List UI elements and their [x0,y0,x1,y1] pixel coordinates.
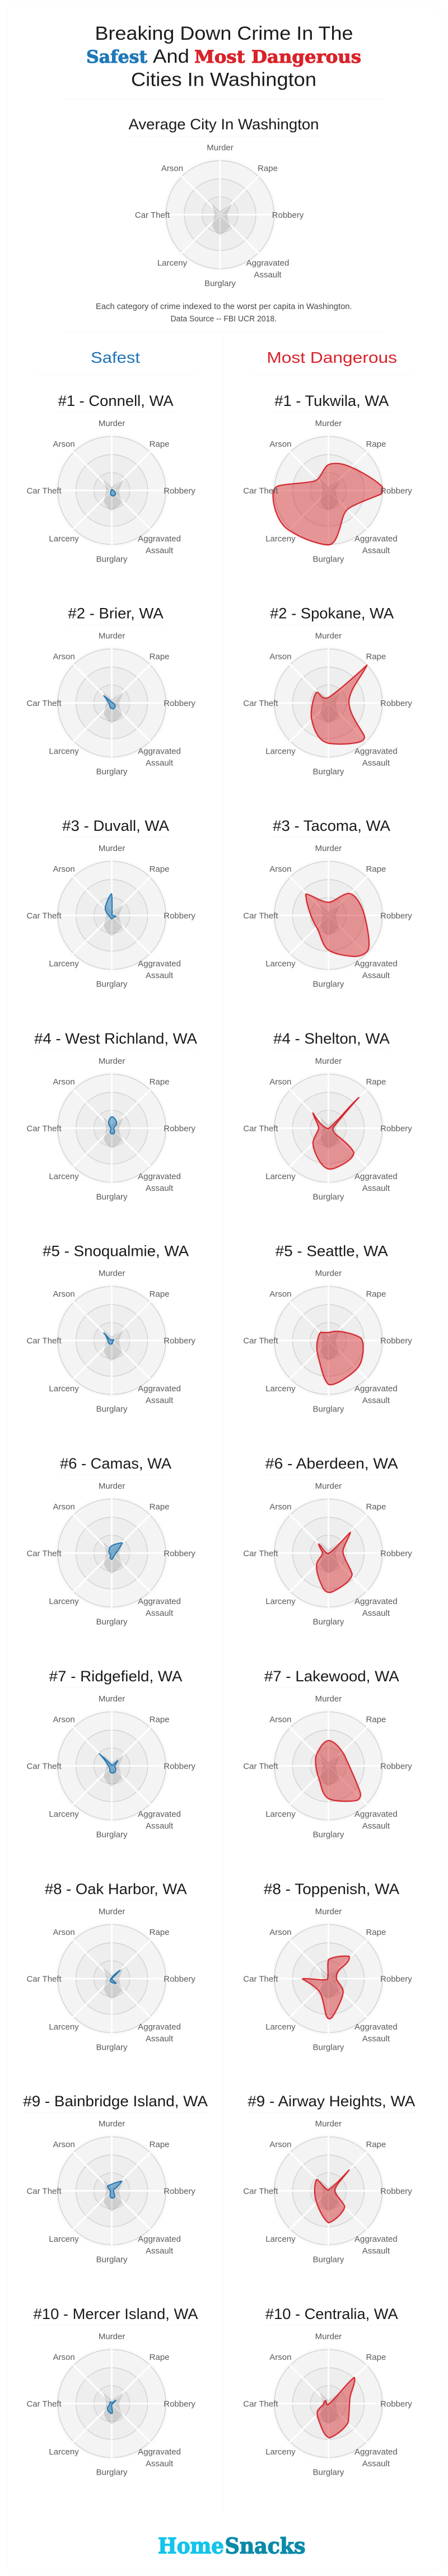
axis labels: Murder [315,1907,342,1916]
radar chart: Aberdeen [243,1481,412,1627]
heading: Brier: #2 - Brier, WA [68,605,164,621]
axis labels [243,2332,412,2477]
heading: West Richland: #4 - West Richland, WA [34,1030,197,1047]
axis labels: Burglary [312,767,344,777]
axis labels: Robbery [164,1549,195,1559]
radar chart: West Richland [26,1056,195,1201]
axis labels: Robbery [380,699,412,708]
title: Breaking Down Crime In The [95,23,353,44]
heading: Centralia: #10 - Centralia, WA [265,2306,398,2322]
axis labels: Burglary [96,2042,128,2053]
column heading: most dangerous: Most Dangerous [267,349,397,366]
axis labels: Car Theft [243,2400,278,2409]
axis labels: Arson [269,1715,291,1724]
data shape: Brier [104,696,115,709]
axis labels: Assault [146,2459,174,2469]
axis labels: Larceny [265,1384,296,1394]
title: Safest [86,47,148,67]
axis labels: Murder [315,1481,342,1491]
axis labels: Larceny [49,1172,79,1181]
axis labels: Murder [99,2119,125,2129]
axis labels: Arson [269,2353,291,2362]
axis labels: Assault [362,971,390,980]
data shape: Duvall [105,894,116,919]
axis labels: Aggravated [354,1597,398,1606]
axis labels: Burglary [96,2255,128,2264]
axis labels: Murder [315,632,342,641]
data shape: Centralia [317,2377,354,2438]
axis labels: Car Theft [26,2187,62,2196]
radar chart: Tacoma [243,844,412,989]
axis labels: Assault [254,270,282,279]
axis labels [243,419,412,564]
axis labels: Arson [53,652,75,662]
axis labels: Rape [150,1077,170,1087]
axis labels: Aggravated [354,534,398,544]
axis labels: Larceny [49,534,79,544]
note: data source [96,302,352,324]
axis labels: Car Theft [243,699,278,708]
axis labels: Aggravated [354,747,398,756]
radar chart: Toppenish [243,1907,412,2053]
axis labels: Robbery [164,911,195,920]
axis labels: Assault [146,971,174,980]
axis labels: Car Theft [243,1336,278,1346]
axis labels: Larceny [49,2447,79,2457]
radar chart: Seattle [243,1269,412,1414]
axis labels: Murder [315,2119,342,2129]
data shape: Mercer Island [108,2400,116,2414]
axis labels: Murder [99,2332,125,2341]
axis labels: Burglary [96,767,128,777]
axis labels: Arson [53,1502,75,1512]
axis labels: Aggravated [138,2234,181,2244]
heading: Duvall: #3 - Duvall, WA [62,817,169,834]
axis labels: Rape [150,1289,170,1299]
axis labels: Larceny [265,959,296,969]
data shape: Camas [109,1543,122,1559]
axis labels [26,1056,195,1201]
axis labels: Rape [150,864,170,874]
axis labels: Assault [362,1184,390,1193]
axis labels: Robbery [380,1549,412,1559]
heading: Snoqualmie: #5 - Snoqualmie, WA [43,1243,189,1260]
axis labels: Larceny [265,534,296,544]
axis labels [26,419,195,564]
axis labels: Car Theft [26,1336,62,1346]
axis labels: Car Theft [26,486,62,496]
axis labels: Robbery [380,1974,412,1984]
axis labels: Burglary [312,1193,344,1201]
heading: Tukwila: #1 - Tukwila, WA [274,392,389,409]
axis labels: Larceny [265,2022,296,2032]
axis labels [26,632,195,777]
heading: Seattle: #5 - Seattle, WA [276,1243,388,1260]
axis labels: Murder [315,419,342,428]
axis labels: Aggravated [138,747,181,756]
data shape: Toppenish [302,1956,349,2019]
axis labels: Car Theft [26,1124,62,1133]
axis labels: Car Theft [26,1549,62,1559]
axis labels: Robbery [164,1336,195,1346]
axis labels: Larceny [49,2022,79,2032]
axis labels: Car Theft [26,699,62,708]
radar chart: Spokane [243,632,412,777]
axis labels: Car Theft [243,1549,278,1559]
axis labels: Aggravated [138,2022,181,2032]
heading: Connell: #1 - Connell, WA [58,392,174,409]
radar chart: Snoqualmie [26,1269,195,1414]
radar chart: average city [135,143,304,288]
axis labels: Larceny [49,1597,79,1606]
axis labels: Aggravated [138,1597,181,1606]
axis labels: Burglary [312,2255,344,2264]
data shape: Bainbridge Island [108,2181,122,2198]
axis labels: Aggravated [246,258,289,268]
axis labels [243,1907,412,2053]
axis labels: Rape [150,440,170,449]
axis labels: Assault [146,546,174,555]
axis labels [26,1907,195,2053]
axis labels: Arson [269,1502,291,1512]
axis labels [135,143,304,288]
axis labels: Aggravated [138,959,181,969]
axis labels: Robbery [164,1974,195,1984]
axis labels [243,844,412,989]
axis labels: Larceny [265,1597,296,1606]
radar chart: Brier [26,632,195,777]
axis labels [243,1056,412,1201]
heading: Shelton: #4 - Shelton, WA [273,1030,390,1047]
axis labels: Car Theft [26,1761,62,1771]
title: And [153,46,189,67]
axis labels [26,2332,195,2477]
axis labels: Burglary [312,1617,344,1627]
axis labels [26,1269,195,1414]
axis labels: Assault [362,1821,390,1831]
axis labels: Assault [362,546,390,555]
heading: Camas: #6 - Camas, WA [60,1455,171,1472]
note: data source: Each category of crime indexed to the worst per capita in Washington. [96,302,352,311]
axis labels: Robbery [380,486,412,496]
axis labels [26,2119,195,2264]
axis labels: Larceny [265,2447,296,2457]
axis labels: Burglary [96,2468,128,2477]
radar chart: Camas [26,1481,195,1627]
axis labels: Robbery [164,1124,195,1133]
axis labels: Arson [53,1715,75,1724]
axis labels [243,1269,412,1414]
axis labels: Larceny [265,2234,296,2244]
radar chart: Mercer Island [26,2332,195,2477]
axis labels: Arson [269,652,291,662]
axis labels: Rape [366,1077,386,1087]
axis labels: Arson [53,1289,75,1299]
axis labels: Aggravated [354,2234,398,2244]
axis labels: Assault [146,758,174,768]
axis labels: Car Theft [26,2400,62,2409]
axis labels: Murder [99,1694,125,1704]
title: Most Dangerous [194,47,361,67]
axis labels: Arson [53,2140,75,2149]
axis labels: Aggravated [354,2447,398,2457]
axis labels: Assault [146,1396,174,1405]
axis labels: Rape [366,652,386,662]
axis labels: Assault [362,1609,390,1618]
axis labels: Larceny [49,1384,79,1394]
axis labels: Rape [366,864,386,874]
axis labels: Arson [269,440,291,449]
axis labels: Robbery [380,1761,412,1771]
axis labels: Rape [366,1715,386,1724]
axis labels: Robbery [272,211,304,220]
axis labels [243,1481,412,1627]
axis labels: Assault [362,2459,390,2469]
axis labels: Burglary [312,2468,344,2477]
heading: Aberdeen: #6 - Aberdeen, WA [265,1455,398,1472]
axis labels: Larceny [49,2234,79,2244]
axis labels: Aggravated [138,1172,181,1181]
axis labels: Assault [362,758,390,768]
axis labels: Burglary [96,1830,128,1840]
axis labels: Aggravated [354,1172,398,1181]
axis labels: Robbery [164,2400,195,2409]
axis labels: Rape [150,2140,170,2149]
data shape: Lakewood [316,1741,361,1801]
data shape: Ridgefield [99,1754,118,1773]
axis labels: Car Theft [243,486,278,496]
axis labels: Arson [53,864,75,874]
axis labels: Arson [161,163,183,173]
axis labels: Aggravated [354,959,398,969]
data shape: Shelton [313,1097,359,1169]
heading: Bainbridge Island: #9 - Bainbridge Island, WA [23,2093,208,2110]
axis labels [243,632,412,777]
axis labels: Burglary [96,554,128,564]
heading: Oak Harbor: #8 - Oak Harbor, WA [45,1881,187,1897]
axis labels: Arson [53,440,75,449]
axis labels: Rape [366,1928,386,1937]
axis labels: Larceny [49,959,79,969]
radar chart: Oak Harbor [26,1907,195,2053]
axis labels: Murder [99,1907,125,1916]
axis labels: Larceny [49,1810,79,1819]
axis labels: Larceny [157,258,188,268]
axis labels: Assault [146,1821,174,1831]
axis labels: Murder [99,1269,125,1278]
axis labels: Robbery [164,1761,195,1771]
heading: Spokane: #2 - Spokane, WA [270,605,394,621]
logo: HomeSnacks: Home [158,2533,224,2559]
axis labels: Rape [150,1928,170,1937]
axis labels: Arson [269,1928,291,1937]
axis labels: Car Theft [243,1124,278,1133]
axis labels: Rape [366,2140,386,2149]
axis labels: Car Theft [243,1974,278,1984]
axis labels: Robbery [380,2187,412,2196]
radar chart: Airway Heights [243,2119,412,2264]
heading: Airway Heights: #9 - Airway Heights, WA [248,2093,416,2110]
axis labels: Rape [150,652,170,662]
data shape: Connell [110,489,115,496]
title: Cities In Washington [131,69,316,91]
axis labels [243,2119,412,2264]
axis labels: Assault [146,1184,174,1193]
axis labels: Car Theft [26,911,62,920]
axis labels: Car Theft [135,211,170,220]
axis labels: Robbery [380,911,412,920]
axis labels [26,1694,195,1840]
column heading: safest: Safest [91,349,140,366]
axis labels: Murder [99,419,125,428]
axis labels: Arson [269,2140,291,2149]
heading: Ridgefield: #7 - Ridgefield, WA [49,1668,183,1685]
axis labels: Arson [53,2353,75,2362]
axis labels: Larceny [265,1172,296,1181]
axis labels: Aggravated [354,2022,398,2032]
axis labels: Burglary [96,1617,128,1627]
axis labels: Robbery [164,699,195,708]
radar chart: Ridgefield [26,1694,195,1840]
axis labels: Murder [99,844,125,853]
axis labels: Burglary [96,1405,128,1414]
axis labels: Rape [150,2353,170,2362]
axis labels: Murder [207,143,234,152]
axis labels: Aggravated [138,534,181,544]
note: data source: Data Source -- FBI UCR 2018. [171,314,277,324]
axis labels: Murder [99,632,125,641]
axis labels: Arson [53,1928,75,1937]
axis labels: Burglary [312,1405,344,1414]
axis labels: Murder [315,844,342,853]
heading: Tacoma: #3 - Tacoma, WA [273,817,390,834]
axis labels: Murder [315,1694,342,1704]
axis labels: Robbery [380,2400,412,2409]
data shape: West Richland [109,1117,116,1134]
radar chart: Bainbridge Island [26,2119,195,2264]
axis labels: Rape [366,1289,386,1299]
axis labels: Burglary [204,279,236,288]
axis labels: Assault [146,2034,174,2044]
axis labels: Burglary [312,980,344,989]
axis labels: Murder [315,1269,342,1278]
axis labels: Rape [150,1715,170,1724]
axis labels: Robbery [164,486,195,496]
axis labels: Larceny [265,1810,296,1819]
axis labels: Aggravated [354,1384,398,1394]
axis labels: Arson [269,864,291,874]
axis labels: Murder [315,2332,342,2341]
axis labels: Rape [366,2353,386,2362]
data shape: Snoqualmie [104,1333,114,1344]
axis labels: Assault [362,1396,390,1405]
axis labels [243,1694,412,1840]
heading: Toppenish: #8 - Toppenish, WA [264,1881,399,1897]
heading: Lakewood: #7 - Lakewood, WA [264,1668,399,1685]
axis labels [26,1481,195,1627]
axis labels: Larceny [49,747,79,756]
axis labels: Aggravated [354,1810,398,1819]
radar chart: Tukwila [243,419,412,564]
data shape: Tacoma [306,894,369,956]
axis labels: Aggravated [138,2447,181,2457]
axis labels: Robbery [380,1336,412,1346]
axis labels: Robbery [380,1124,412,1133]
radar chart: Shelton [243,1056,412,1201]
axis labels: Burglary [312,2042,344,2053]
axis labels: Aggravated [138,1810,181,1819]
axis labels: Burglary [312,1830,344,1840]
data shape: Tukwila [273,464,382,545]
axis labels: Murder [99,1056,125,1066]
data shape: Seattle [317,1331,363,1385]
axis labels: Assault [362,2246,390,2256]
axis labels: Aggravated [138,1384,181,1394]
axis labels: Arson [53,1077,75,1087]
axis labels: Rape [366,440,386,449]
title [86,23,361,91]
axis labels: Rape [366,1502,386,1512]
radar chart: Connell [26,419,195,564]
axis labels: Robbery [164,2187,195,2196]
axis labels: Arson [269,1077,291,1087]
radar chart: Duvall [26,844,195,989]
data shape: Spokane [311,665,367,744]
radar chart: Lakewood [243,1694,412,1840]
heading: Mercer Island: #10 - Mercer Island, WA [34,2306,198,2322]
axis labels: Burglary [96,980,128,989]
axis labels: Assault [362,2034,390,2044]
axis labels: Murder [315,1056,342,1066]
axis labels [26,844,195,989]
axis labels: Car Theft [243,2187,278,2196]
axis labels: Arson [269,1289,291,1299]
axis labels: Larceny [265,747,296,756]
axis labels: Car Theft [243,1761,278,1771]
axis labels: Rape [258,163,278,173]
logo: HomeSnacks: Snacks [225,2533,306,2559]
heading: average city: Average City In Washington [129,116,319,133]
axis labels: Assault [146,2246,174,2256]
axis labels: Assault [146,1609,174,1618]
axis labels: Car Theft [243,911,278,920]
axis labels: Rape [150,1502,170,1512]
axis labels: Car Theft [26,1974,62,1984]
logo: HomeSnacks [158,2533,306,2559]
axis labels: Burglary [312,554,344,564]
data shape: Airway Heights [315,2170,349,2223]
axis labels: Murder [99,1481,125,1491]
radar chart: Centralia [243,2332,412,2477]
axis labels: Burglary [96,1193,128,1201]
data shape: Oak Harbor [110,1970,120,1983]
data shape: Aberdeen [316,1532,352,1592]
